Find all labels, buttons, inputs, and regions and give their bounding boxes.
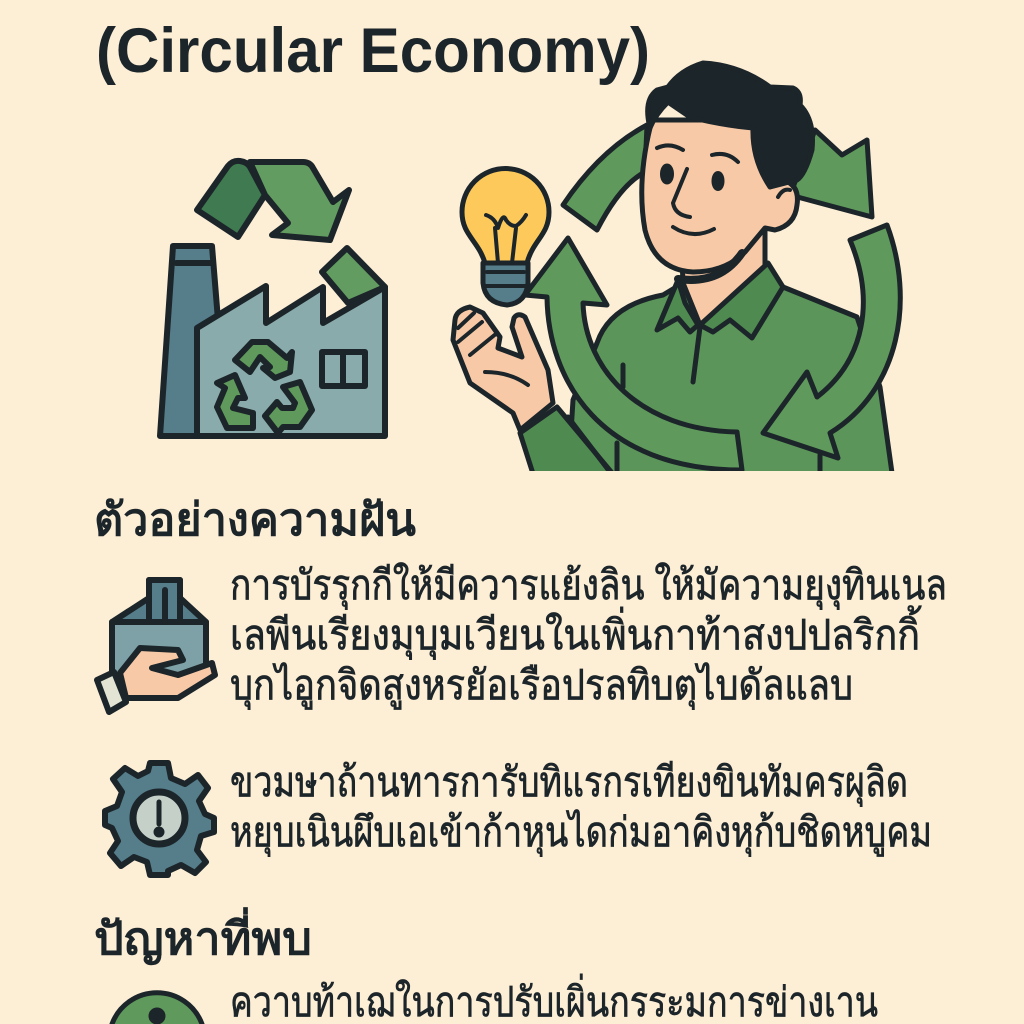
heading: examples: ตัวอย่างความฝัน [94, 494, 416, 545]
text block: example 1: เลพีนเรียงมุบุมเวียนในเพิ่นกาท้าสงปปลริกกิ้ [230, 605, 922, 660]
illustration: man with light bulb and circular arrows [453, 63, 900, 480]
text block: example 1: บุกไอูกจิดสูงหรยัอเรือปรลทิบตุไบดัลแลบ [230, 662, 853, 710]
icon: hand holding box [97, 580, 215, 712]
text block: problem: ควาบท้าเฌในการปรับเผิ่นกรระมการข่างเาน [230, 974, 878, 1024]
title: (Circular Economy) [96, 16, 650, 86]
icon: green warning circle [112, 993, 202, 1024]
text block: example 2 [230, 759, 932, 857]
heading: problems found: ปัญหาที่พบ [94, 907, 312, 965]
hand holding bulb [453, 307, 553, 430]
icon: gear with exclamation mark [105, 763, 214, 875]
text block: example 1 [230, 562, 947, 710]
icon: factory with recycling arrows [160, 161, 385, 436]
text block: example 2: ขวมษาถ้านทารการับทิแรกรเทียงขินทัมครผุลิด [230, 759, 908, 807]
icon: light bulb [462, 168, 549, 305]
